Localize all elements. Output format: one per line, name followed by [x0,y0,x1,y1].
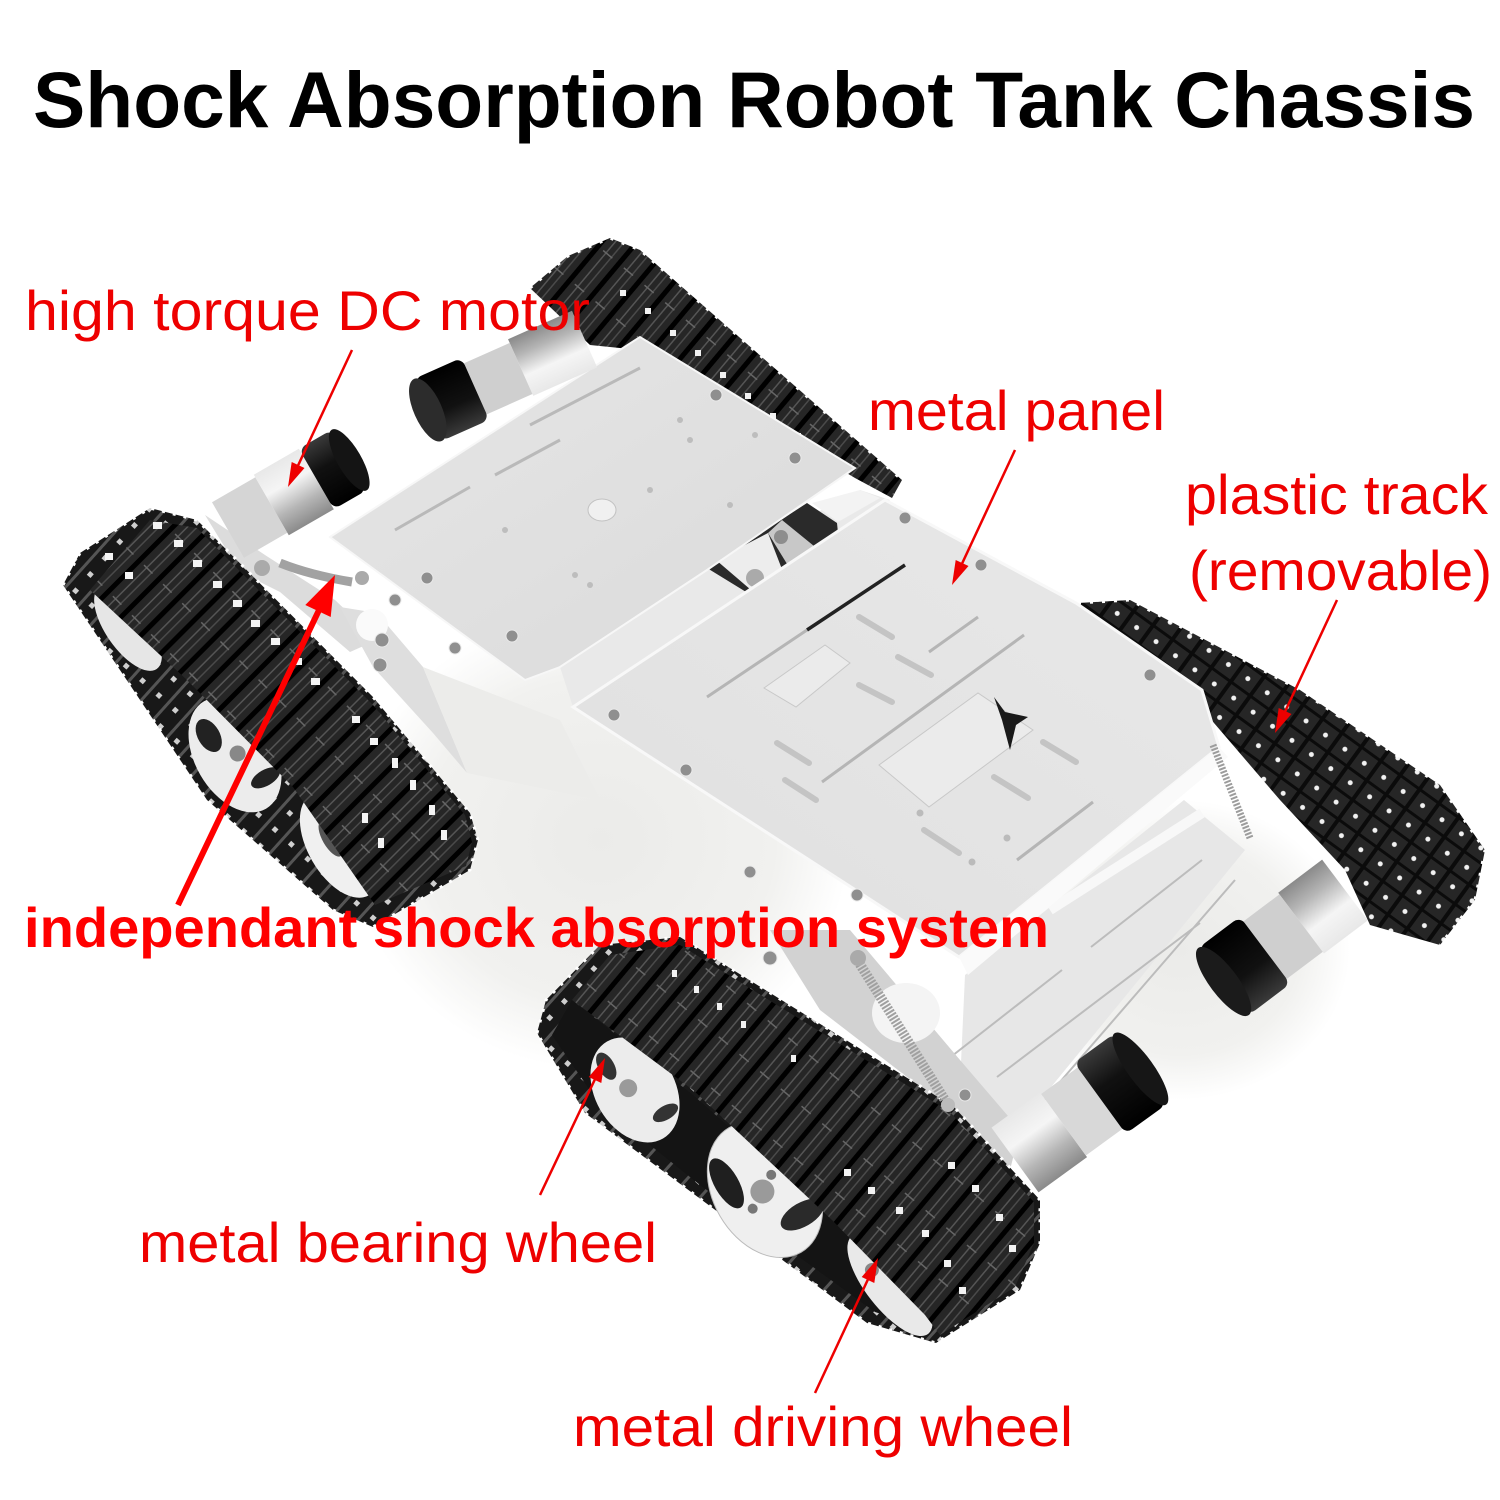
motor: right [1187,856,1370,1023]
center deck strip [560,490,890,707]
springs [254,560,1250,1112]
rear motor [401,309,599,447]
lower deck [943,800,1245,1125]
title: Shock Absorption Robot Tank Chassis [33,55,1475,144]
track top face [572,945,1034,1335]
screws [373,389,1156,1101]
label: metal bearing wheel: metal bearing wheel [139,1211,657,1274]
arrow: bearing wheel [540,1058,605,1195]
arrow: motor [288,350,352,487]
arrow: panel [952,450,1015,585]
center bracket [707,490,880,613]
left side bracket [205,515,600,800]
label: high torque DC motor: high torque DC motor [25,279,590,342]
rear plate [330,337,855,680]
near right track [537,937,1040,1349]
left drive wheel [81,574,175,682]
track holes [105,522,447,848]
arrow: shock absorption [178,575,335,905]
bearing wheel 1 [169,681,301,829]
arrow: driving wheel [815,1258,878,1393]
near left track [63,508,478,927]
label: removable: (removable) [1189,539,1492,602]
driving wheel [833,1221,947,1349]
arrow: track [1275,600,1337,733]
front plate [573,500,1228,975]
motor: upper left [210,424,377,560]
rear left track [530,238,902,498]
label: metal driving wheel: metal driving wheel [573,1395,1073,1458]
rear right track [1078,600,1485,945]
label: metal panel: metal panel [868,379,1165,442]
bearing wheel large [684,1102,846,1278]
bearing wheel 2 [283,779,397,911]
track top face [90,520,472,905]
track holes [672,970,1016,1294]
bearing wheel [572,1022,698,1158]
motor: front [989,1026,1177,1196]
label: plastic track: plastic track [1185,463,1489,526]
right side bracket [770,930,1020,1190]
label: independant shock absorption system: independant shock absorption system [24,896,1049,959]
